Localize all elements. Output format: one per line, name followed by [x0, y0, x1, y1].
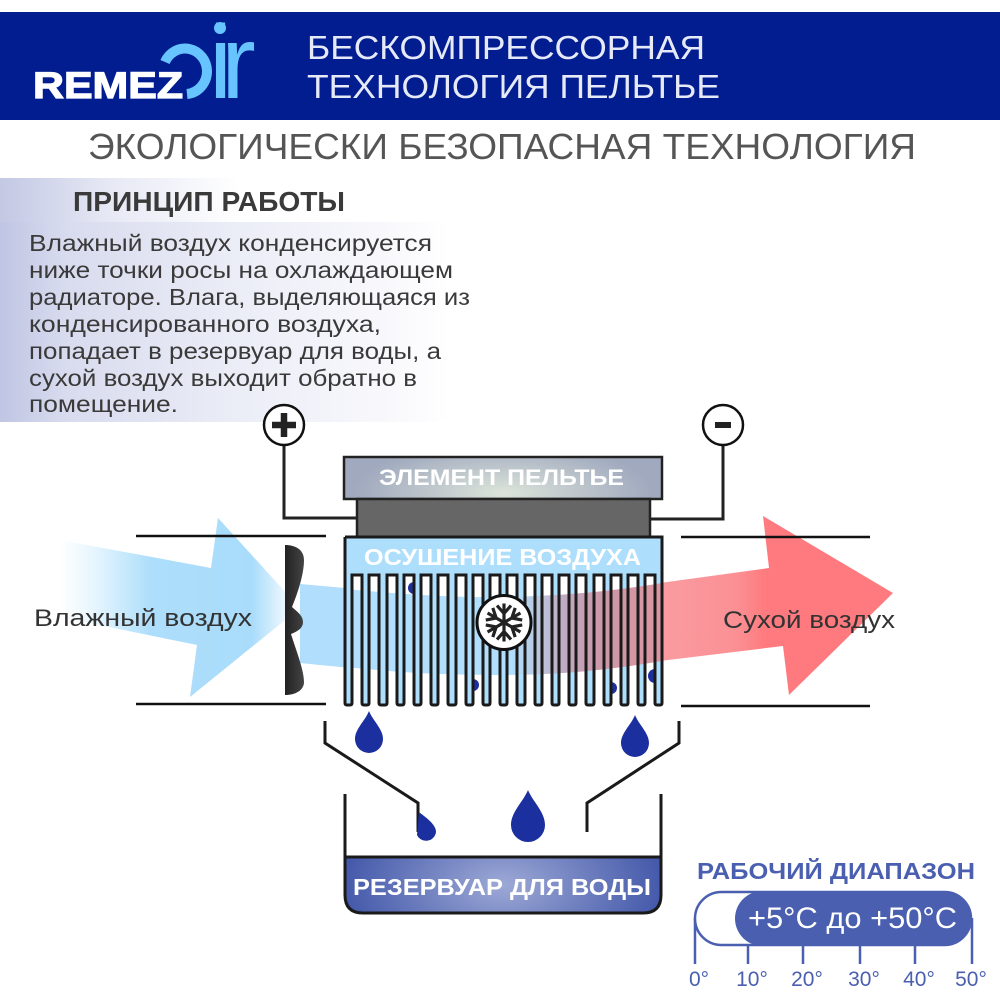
water drop at funnel	[417, 812, 436, 841]
range pill: +5°C до +50°C	[748, 902, 957, 935]
left air arrow: humid air	[60, 518, 300, 697]
water reservoir	[345, 794, 661, 913]
panel body text: сухой воздух выходит обратно в	[29, 365, 417, 391]
air flow band from fan to heat sink	[300, 583, 662, 675]
duct lines	[136, 536, 870, 706]
range pill	[695, 891, 972, 946]
peltier element	[344, 457, 662, 499]
logo	[33, 5, 254, 121]
heat sink: ОСУШЕНИЕ ВОЗДУХА	[364, 544, 641, 570]
range scale labels: 10°	[736, 968, 768, 991]
panel heading: ПРИНЦИП РАБОТЫ	[73, 186, 345, 217]
heat sink	[344, 537, 663, 706]
peltier element: ЭЛЕМЕНТ ПЕЛЬТЬЕ	[379, 465, 624, 490]
header band	[0, 5, 1000, 121]
logo: ir	[209, 5, 254, 121]
header title	[307, 29, 720, 105]
panel body text: радиаторе. Влага, выделяющаяся из	[29, 284, 470, 310]
water drop center	[511, 790, 545, 842]
range scale labels: 0°	[689, 968, 709, 991]
panel body text: конденсированного воздуха,	[29, 311, 381, 337]
hot plate block	[357, 499, 650, 537]
icon: minus terminal	[703, 405, 743, 445]
range title: РАБОЧИЙ ДИАПАЗОН	[697, 857, 975, 884]
right air arrow: dry air	[660, 516, 893, 695]
condensate droplets on fins	[408, 582, 655, 694]
header title: БЕСКОМПРЕССОРНАЯ	[307, 29, 705, 66]
water drop left	[355, 711, 383, 753]
air flow band through fins	[345, 583, 662, 675]
range scale labels: 20°	[791, 968, 823, 991]
range scale labels	[689, 968, 987, 991]
fin outlines	[345, 537, 662, 705]
range scale labels: 40°	[903, 968, 935, 991]
logo: REMEZ	[33, 65, 183, 106]
panel body text: попадает в резервуар для воды, а	[29, 338, 441, 364]
panel body text	[29, 230, 470, 417]
icon: plus terminal	[264, 405, 304, 445]
range scale ticks	[695, 918, 972, 964]
wires	[284, 445, 723, 519]
label: dry air: Сухой воздух	[723, 607, 895, 634]
range scale labels: 30°	[848, 968, 880, 991]
panel body text: помещение.	[29, 391, 178, 417]
funnel	[325, 721, 679, 832]
subtitle: ЭКОЛОГИЧЕСКИ БЕЗОПАСНАЯ ТЕХНОЛОГИЯ	[88, 126, 916, 167]
panel: principle of operation	[0, 178, 470, 422]
icon: fan	[285, 545, 304, 695]
icon: snowflake	[477, 596, 531, 650]
water drop right	[621, 715, 649, 757]
range scale labels: 50°	[955, 968, 987, 991]
panel body text: ниже точки росы на охлаждающем	[29, 257, 453, 283]
working range	[689, 857, 987, 991]
label: humid air: Влажный воздух	[34, 605, 252, 632]
panel body text: Влажный воздух конденсируется	[29, 230, 432, 256]
water reservoir: РЕЗЕРВУАР ДЛЯ ВОДЫ	[353, 874, 651, 900]
header title: ТЕХНОЛОГИЯ ПЕЛЬТЬЕ	[307, 68, 720, 105]
